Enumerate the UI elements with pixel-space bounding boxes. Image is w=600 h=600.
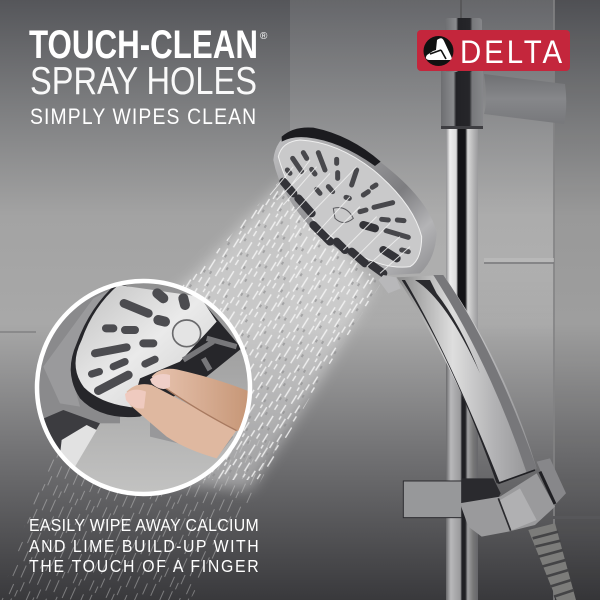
head black rim highlight (282, 127, 381, 166)
head rim (44, 290, 109, 406)
chrome neck (44, 410, 100, 450)
shower head (270, 127, 437, 275)
head face (76, 285, 217, 407)
backing (150, 422, 233, 450)
water spray (0, 175, 380, 600)
subtitle: SPRAY HOLES (30, 60, 257, 103)
push button (173, 320, 201, 347)
title (29, 23, 268, 103)
wall bracket (484, 74, 566, 124)
holder notch (462, 478, 501, 503)
tagline: SIMPLY WIPES CLEAN (30, 105, 256, 129)
spray holes (283, 153, 408, 273)
description text: THE TOUCH OF A FINGER (29, 556, 259, 576)
title: TOUCH-CLEAN (29, 23, 258, 67)
head connector (378, 275, 401, 293)
description text: AND LIME BUILD-UP WITH (29, 536, 259, 556)
hose (528, 523, 576, 600)
rear nozzles (183, 338, 237, 370)
holder body (460, 473, 555, 537)
head outer rim (273, 129, 437, 275)
handle body (397, 275, 537, 483)
holes (92, 293, 185, 391)
Delta logo (417, 30, 570, 71)
description text: EASILY WIPE AWAY CALCIUM (29, 515, 259, 535)
Delta logo: DELTA (460, 34, 563, 70)
spray streaks over face (270, 160, 410, 273)
head dark underside (71, 283, 242, 417)
description text (29, 515, 259, 576)
shower slide bar (441, 18, 566, 600)
holder right clip (537, 458, 566, 505)
fingers (152, 369, 250, 433)
wall holder left block (403, 481, 462, 518)
title: ® (260, 31, 268, 42)
head face (278, 140, 422, 267)
detail circle: finger wiping spray holes (30, 275, 260, 500)
hand shower handle (378, 275, 576, 600)
wall behind head (39, 289, 120, 424)
